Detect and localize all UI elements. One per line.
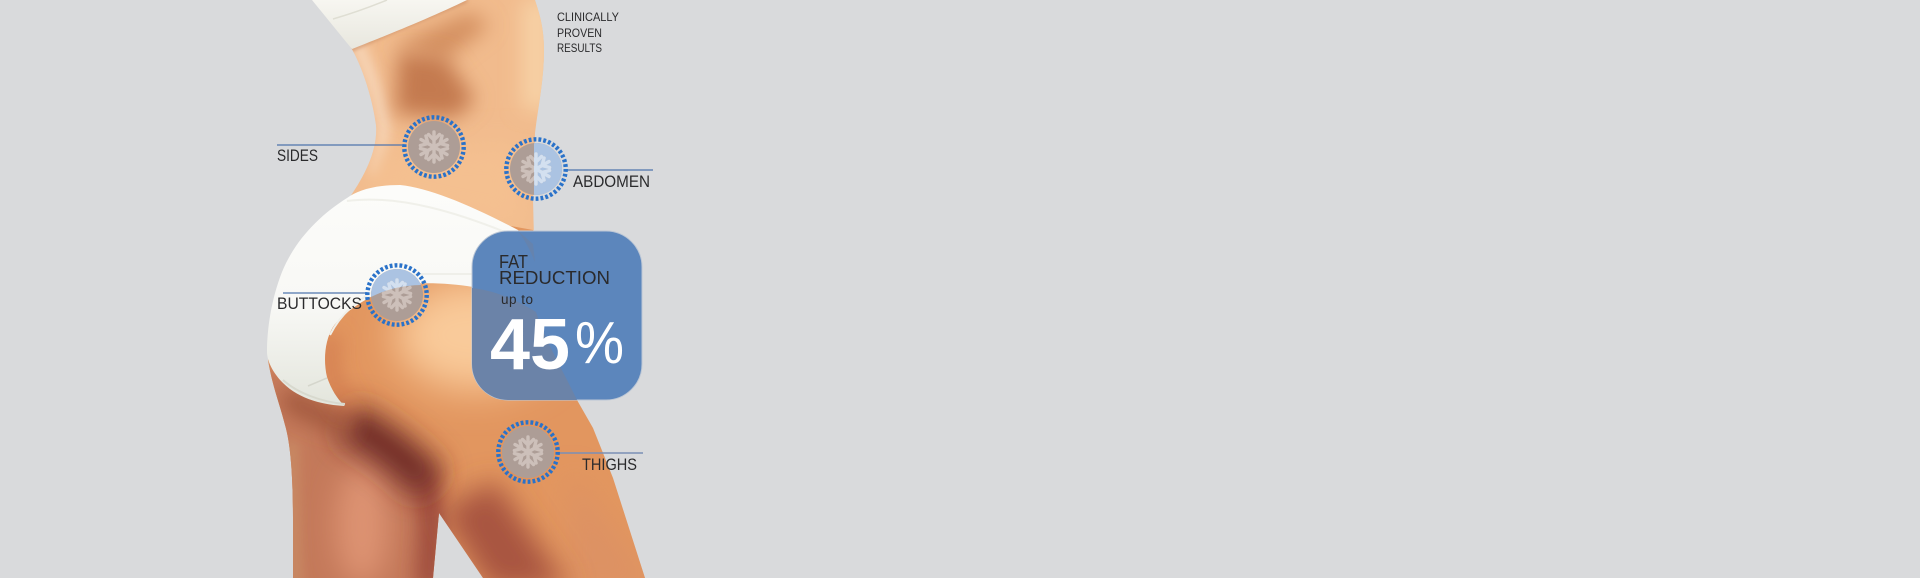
top text: clinically proven results: PROVEN bbox=[557, 28, 602, 40]
marker: abdomen: ABDOMEN bbox=[573, 173, 650, 191]
figure: torso bbox=[348, 0, 550, 240]
figure: white briefs bbox=[267, 185, 536, 406]
marker: thighs bbox=[498, 422, 643, 482]
top text: clinically proven results: CLINICALLY bbox=[557, 12, 619, 24]
marker: sides: SIDES bbox=[277, 147, 318, 165]
figure: bra bbox=[312, 0, 467, 49]
marker: thighs: THIGHS bbox=[582, 456, 637, 474]
callout: fat reduction: FAT bbox=[499, 251, 528, 272]
marker: buttocks bbox=[277, 265, 427, 325]
marker: buttocks: BUTTOCKS bbox=[277, 295, 362, 313]
marker: abdomen bbox=[506, 139, 653, 199]
callout: fat reduction: REDUCTION bbox=[499, 267, 610, 288]
callout: fat reduction bbox=[472, 231, 642, 400]
marker: sides bbox=[277, 117, 464, 177]
callout: fat reduction: up to bbox=[501, 292, 533, 307]
top text: clinically proven results bbox=[557, 12, 619, 55]
top text: clinically proven results: RESULTS bbox=[557, 43, 602, 55]
callout: fat reduction: 45 bbox=[490, 305, 570, 385]
callout: fat reduction: % bbox=[575, 310, 624, 376]
figure: hips and legs bbox=[268, 226, 645, 578]
